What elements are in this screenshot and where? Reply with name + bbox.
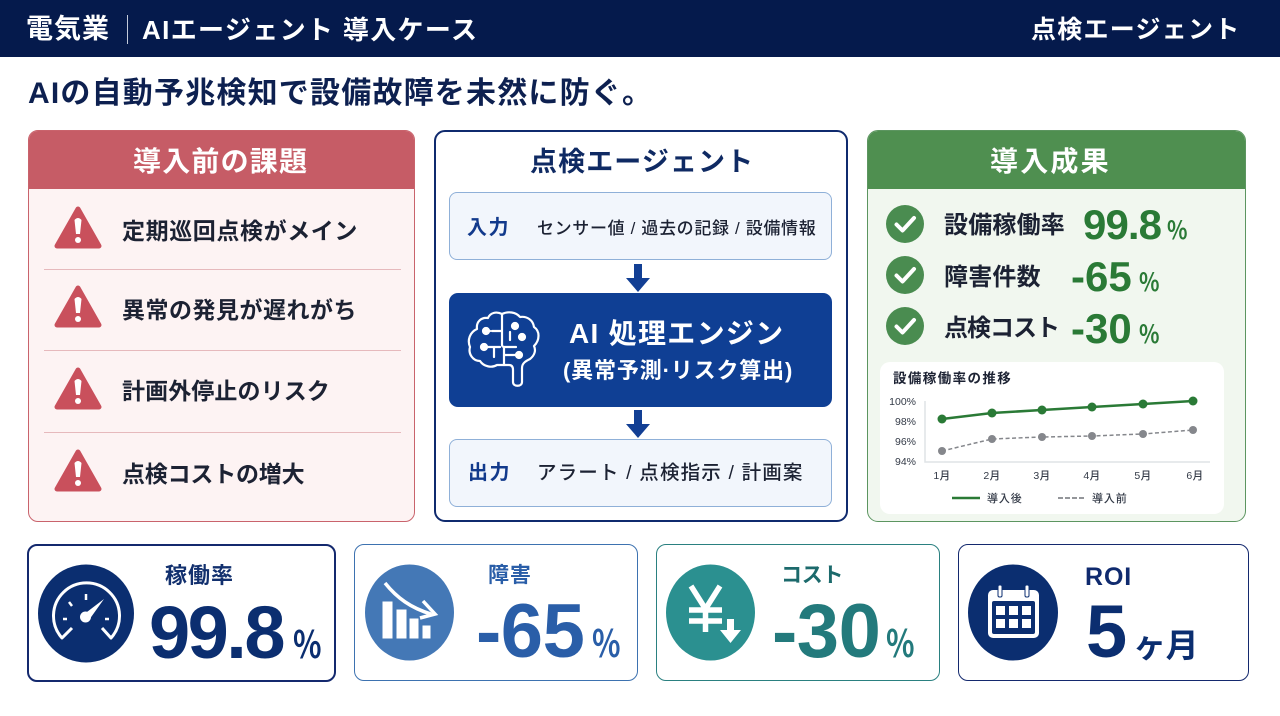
chart legend: 導入後 xyxy=(987,491,1023,505)
line chart: availability trend: 3月 xyxy=(1033,470,1051,482)
series: after xyxy=(938,396,1198,424)
icon: warning 3 xyxy=(54,368,102,410)
engine title: AI 処理エンジン xyxy=(569,318,784,349)
icon: yen down xyxy=(666,564,755,660)
icon: warning 4 xyxy=(54,450,102,492)
KPI card: failures xyxy=(354,544,638,681)
KPI value: -30 xyxy=(772,589,880,674)
result label 2: 障害件数 xyxy=(944,264,1041,291)
KPI value: 5ヶ月 xyxy=(1086,590,1198,673)
result value 3: -30 xyxy=(1071,305,1132,352)
icon: check 1 xyxy=(886,205,924,243)
panel: results xyxy=(867,130,1246,522)
line chart: availability trend: 2月 xyxy=(983,470,1001,482)
KPI card: cost xyxy=(656,544,940,681)
line chart: availability trend xyxy=(880,362,1224,514)
result value 2: % xyxy=(1139,263,1159,299)
challenge 2: 異常の発見が遅れがち xyxy=(122,297,357,323)
line chart: availability trend: 96% xyxy=(895,436,916,448)
line chart: availability trend: 4月 xyxy=(1083,470,1101,482)
chart legend xyxy=(952,491,1128,505)
input box xyxy=(449,192,832,260)
icon: warning 1 xyxy=(54,206,102,248)
result label 1: 設備稼働率 xyxy=(944,212,1065,239)
result value 1: % xyxy=(1167,211,1188,247)
panel heading xyxy=(27,129,418,189)
header subtitle: AIエージェント 導入ケース xyxy=(142,15,478,45)
line chart: availability trend: 94% xyxy=(895,456,916,468)
chart title: 設備稼働率の推移 xyxy=(893,370,1012,386)
results heading: 導入成果 xyxy=(990,146,1111,177)
result value 3 xyxy=(1071,305,1159,352)
panel: inspection agent xyxy=(434,130,848,522)
header bar xyxy=(0,0,1280,57)
agent heading: 点検エージェント xyxy=(530,147,754,177)
result label 3: 点検コスト xyxy=(944,315,1059,342)
line chart: availability trend: 1月 xyxy=(933,470,951,482)
challenge 3: 計画外停止のリスク xyxy=(122,378,330,404)
line chart: availability trend: 98% xyxy=(895,416,916,428)
results header band xyxy=(866,129,1249,189)
KPI value: % xyxy=(592,613,621,668)
KPI value: % xyxy=(293,614,322,669)
challenge 4: 点検コストの増大 xyxy=(122,461,304,487)
KPI label: ROI xyxy=(1085,563,1132,591)
AI engine box xyxy=(449,293,832,407)
panel: challenges before adoption xyxy=(28,130,415,522)
input label: 入力 xyxy=(467,217,510,239)
line chart: availability trend: 6月 xyxy=(1186,470,1204,482)
KPI card: availability xyxy=(27,544,336,682)
challenge 1: 定期巡回点検がメイン xyxy=(122,218,358,244)
KPI label: コスト xyxy=(781,564,843,587)
challenges heading text: 導入前の課題 xyxy=(133,146,308,177)
icon: calendar xyxy=(968,564,1058,660)
KPI value: -65 xyxy=(476,589,584,674)
header title: 電気業 xyxy=(26,14,110,44)
icon: warning 2 xyxy=(54,286,102,328)
line chart: availability trend: 100% xyxy=(889,396,916,408)
input items: センサー値 / 過去の記録 / 設備情報 xyxy=(537,219,816,238)
result value 2: -65 xyxy=(1071,253,1132,300)
KPI label: 稼働率 xyxy=(165,563,234,588)
header agent name: 点検エージェント xyxy=(1031,16,1241,44)
series: before xyxy=(938,426,1197,455)
KPI value: % xyxy=(886,613,915,668)
KPI label: 障害 xyxy=(488,564,532,587)
icon: check 2 xyxy=(886,256,924,294)
output box xyxy=(449,439,832,507)
arrow: engine to output xyxy=(626,410,650,438)
icon: AI brain xyxy=(468,311,540,387)
result value 1: 99.8 xyxy=(1083,201,1161,248)
engine subtitle: (異常予測·リスク算出) xyxy=(563,358,793,383)
output label: 出力 xyxy=(468,462,511,484)
result value 2 xyxy=(1071,253,1159,300)
output items: アラート / 点検指示 / 計画案 xyxy=(537,462,804,484)
result value 3: % xyxy=(1139,315,1159,351)
KPI card: ROI xyxy=(958,544,1249,681)
icon: gauge xyxy=(38,564,134,662)
icon: falling bar chart xyxy=(365,564,454,660)
chart legend: 導入前 xyxy=(1092,491,1128,505)
main heading: AIの自動予兆検知で設備故障を未然に防ぐ。 xyxy=(28,77,653,110)
KPI value: 99.8 xyxy=(149,591,283,674)
icon: check 3 xyxy=(886,307,924,345)
line chart: availability trend: 5月 xyxy=(1134,470,1152,482)
arrow: input to engine xyxy=(626,264,650,292)
